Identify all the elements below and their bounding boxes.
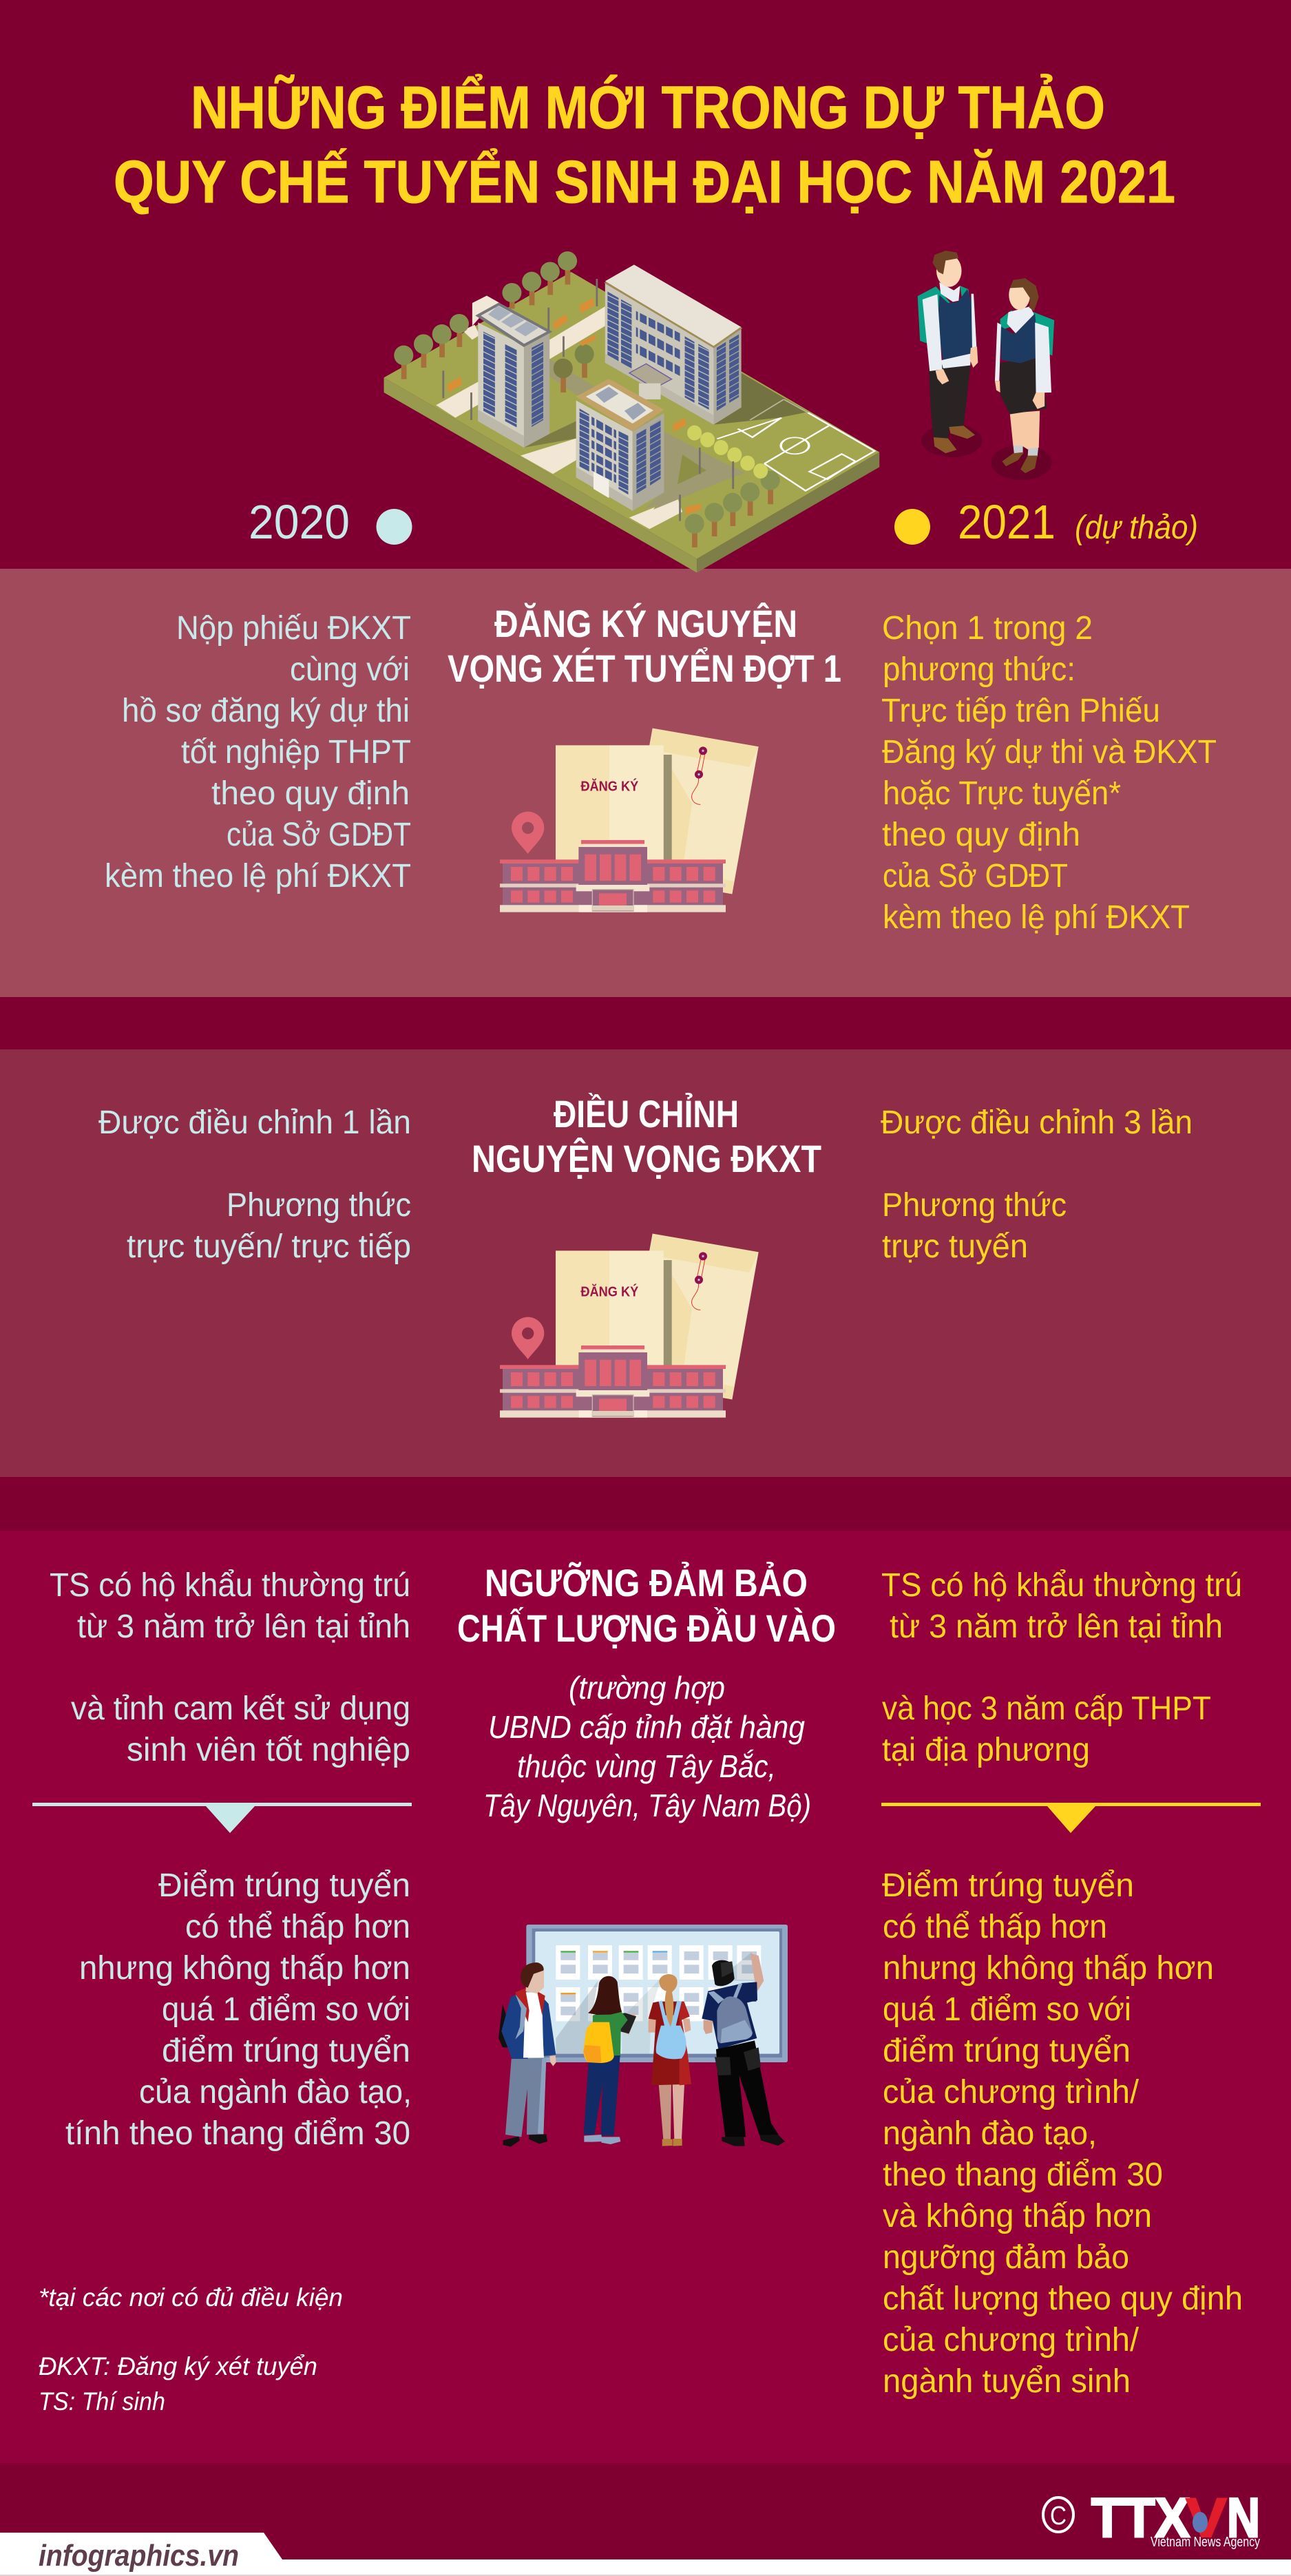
building: rear block [605,264,742,425]
panel 1 heading: ĐĂNG KÝ NGUYỆN [494,602,797,645]
panel 3 subheading note: thuộc vùng Tây Bắc, [517,1748,776,1784]
legend: 2021 draft [894,495,1198,549]
panel 3 left conditions: 2020 [50,1567,410,1768]
panel 2 left text: 2020: Được điều chỉnh 1 lần [98,1104,411,1141]
panel 3 right result: 2021: quá 1 điểm so với [883,1991,1131,2028]
title: NHỮNG ĐIỂM MỚI TRONG DỰ THẢO [191,74,1105,141]
building: front tower [576,379,664,511]
panel 3 right result: 2021: có thể thấp hơn [883,1909,1107,1945]
logo: TTXVN: V [1186,2487,1227,2549]
panel 3 heading: NGƯỠNG ĐẢM BẢO [485,1561,808,1604]
legend: 2021 draft: 2021 [958,495,1056,549]
panel 1 right text: 2021: kèm theo lệ phí ĐKXT [883,899,1190,936]
student: girl [991,278,1054,480]
illustration: students at notice board [498,1925,788,2147]
panel 3 right result: 2021: của chương trình/ [883,2074,1140,2111]
panel 3 left result: 2020: Điểm trúng tuyển [158,1867,410,1904]
panel 1 right text: 2021: Trực tiếp trên Phiếu [881,693,1160,729]
panel 3 left result: 2020: của ngành đào tạo, [139,2074,412,2111]
panel 3 right result: 2021: nhưng không thấp hơn [883,1950,1214,1987]
logo: TTXVN [1043,2487,1260,2550]
panel 3 subheading note [483,1670,811,1823]
panel 3 left conditions: 2020: TS có hộ khẩu thường trú [50,1567,410,1604]
panel 1 left text: 2020: tốt nghiệp THPT [181,734,411,771]
panel 3 left result: 2020 [65,1867,412,2152]
panel: ngưỡng đảm bảo [0,1531,1291,2463]
panel 3 right result: 2021: ngưỡng đảm bảo [883,2239,1129,2276]
panel 1 heading [448,602,841,690]
panel 1 left text: 2020: cùng với [290,651,410,688]
logo: TTXVN: Vietnam News Agency [1151,2535,1260,2550]
panel 1 right text: 2021: của Sở GDĐT [883,858,1068,894]
panel 3 right result: 2021 [882,1867,1243,2400]
panel 1 left text: 2020 [105,610,411,894]
panel 3 heading [457,1561,836,1650]
panel 1 left text: 2020: Nộp phiếu ĐKXT [176,610,411,647]
panel 1 right text: 2021: hoặc Trực tuyến* [883,775,1121,812]
footnotes: ĐKXT: Đăng ký xét tuyển [39,2352,317,2380]
panel 3 left result: 2020: điểm trúng tuyển [162,2033,410,2069]
footer tab [0,2533,1291,2576]
icon: registration file and school (panel 2) [500,1234,759,1418]
panel 3 heading: CHẤT LƯỢNG ĐẦU VÀO [457,1606,836,1650]
panel 1 right text: 2021: phương thức: [883,651,1075,688]
building: left tower [472,295,549,448]
notice board [526,1925,788,2062]
panel 2 right text: 2021 [881,1104,1193,1265]
panel 2 heading: NGUYỆN VỌNG ĐKXT [472,1137,821,1180]
panel: điều chỉnh nguyện vọng [0,1049,1291,1477]
panel 2 right text: 2021: Được điều chỉnh 3 lần [881,1104,1193,1141]
panel 3 subheading note: UBND cấp tỉnh đặt hàng [488,1709,805,1745]
icon: registration file and school [500,729,759,912]
logo: TTXVN: C [1050,2502,1067,2531]
illustration: campus [384,251,879,573]
panel 2 heading [472,1092,821,1180]
site url: infographics.vn [39,2539,239,2573]
panel 3 left conditions: 2020: và tỉnh cam kết sử dụng [71,1690,410,1727]
legend: 2021 draft: (dự thảo) [1075,510,1198,546]
boy with navy jacket [498,1962,556,2147]
icon: registration file and school: ĐĂNG KÝ [580,777,639,794]
divider arrow: 2020 [32,1803,412,1833]
panel 3 left result: 2020: quá 1 điểm so với [162,1991,410,2028]
panel 1 right text: 2021: Đăng ký dự thi và ĐKXT [882,734,1217,771]
hedge [687,426,768,479]
panel 3 right result: 2021: và không thấp hơn [883,2198,1152,2234]
legend: 2020 [249,495,412,549]
panel 3 left result: 2020: có thể thấp hơn [185,1909,410,1945]
icon: registration file and school (panel 2): ĐĂNG KÝ [580,1283,639,1299]
benches and lamps [447,298,701,514]
panel 2 right text: 2021: trực tuyến [882,1228,1028,1265]
panel 1 heading: VỌNG XÉT TUYỂN ĐỢT 1 [448,647,841,690]
panel 2 right text: 2021: Phương thức [882,1187,1067,1224]
panel 3 right conditions: 2021: và học 3 năm cấp THPT [882,1690,1211,1727]
footnotes: TS: Thí sinh [39,2387,165,2416]
panel 3 left result: 2020: nhưng không thấp hơn [79,1950,410,1987]
boy with grey backpack [702,1954,785,2146]
trees [394,251,780,547]
title [114,74,1175,216]
logo: TTXVN: N [1227,2487,1260,2549]
legend: 2020: 2020 [249,495,350,549]
panel 3 right conditions: 2021: từ 3 năm trở lên tại tỉnh [890,1609,1223,1645]
panel: đăng ký nguyện vọng [0,569,1291,997]
panel 2 left text: 2020: trực tuyến/ trực tiếp [127,1228,411,1265]
panel 3 right result: 2021: Điểm trúng tuyển [882,1867,1134,1904]
panel 3 right conditions: 2021: tại địa phương [882,1732,1090,1768]
panel 1 right text: 2021 [881,610,1217,936]
panel 3 right result: 2021: theo thang điểm 30 [883,2157,1163,2193]
girl with yellow backpack [583,1976,636,2144]
footnotes: *tại các nơi có đủ điều kiện [39,2283,343,2312]
footnotes [39,2283,343,2416]
panel 1 right text: 2021: theo quy định [882,817,1080,853]
student: boy [918,251,983,457]
panel 3 left conditions: 2020: sinh viên tốt nghiệp [127,1732,410,1768]
panel 3 left conditions: 2020: từ 3 năm trở lên tại tỉnh [77,1609,410,1645]
panel 2 left text: 2020 [98,1104,411,1265]
girl with red dress [649,1974,691,2146]
panel 1 left text: 2020: theo quy định [211,775,410,812]
panel 3 right conditions: 2021: TS có hộ khẩu thường trú [881,1567,1242,1604]
logo: TTXVN: TTX [1091,2487,1190,2549]
panel 3 subheading note: (trường hợp [569,1670,725,1706]
panel 1 left text: 2020: hồ sơ đăng ký dự thi [122,693,410,729]
panel 2 left text: 2020: Phương thức [227,1187,411,1224]
panel 3 right result: 2021: ngành đào tạo, [883,2115,1097,2152]
panel 2 heading: ĐIỀU CHỈNH [554,1092,739,1135]
panel 1 left text: 2020: của Sở GDĐT [227,817,411,853]
panel 3 right result: 2021: ngành tuyển sinh [883,2363,1131,2400]
panel 3 subheading note: Tây Nguyên, Tây Nam Bộ) [483,1788,811,1823]
panel 3 right conditions: 2021 [881,1567,1242,1768]
panel 3 right result: 2021: chất lượng theo quy định [883,2281,1243,2317]
panel 3 right result: 2021: điểm trúng tuyển [883,2033,1131,2069]
panel 1 right text: 2021: Chọn 1 trong 2 [882,610,1093,647]
illustration: two students [918,251,1054,480]
panel 1 left text: 2020: kèm theo lệ phí ĐKXT [105,858,411,894]
panel 3 left result: 2020: tính theo thang điểm 30 [65,2115,410,2152]
football field [717,412,874,491]
divider arrow: 2021 [881,1803,1261,1833]
panel 3 right result: 2021: của chương trình/ [883,2322,1140,2358]
